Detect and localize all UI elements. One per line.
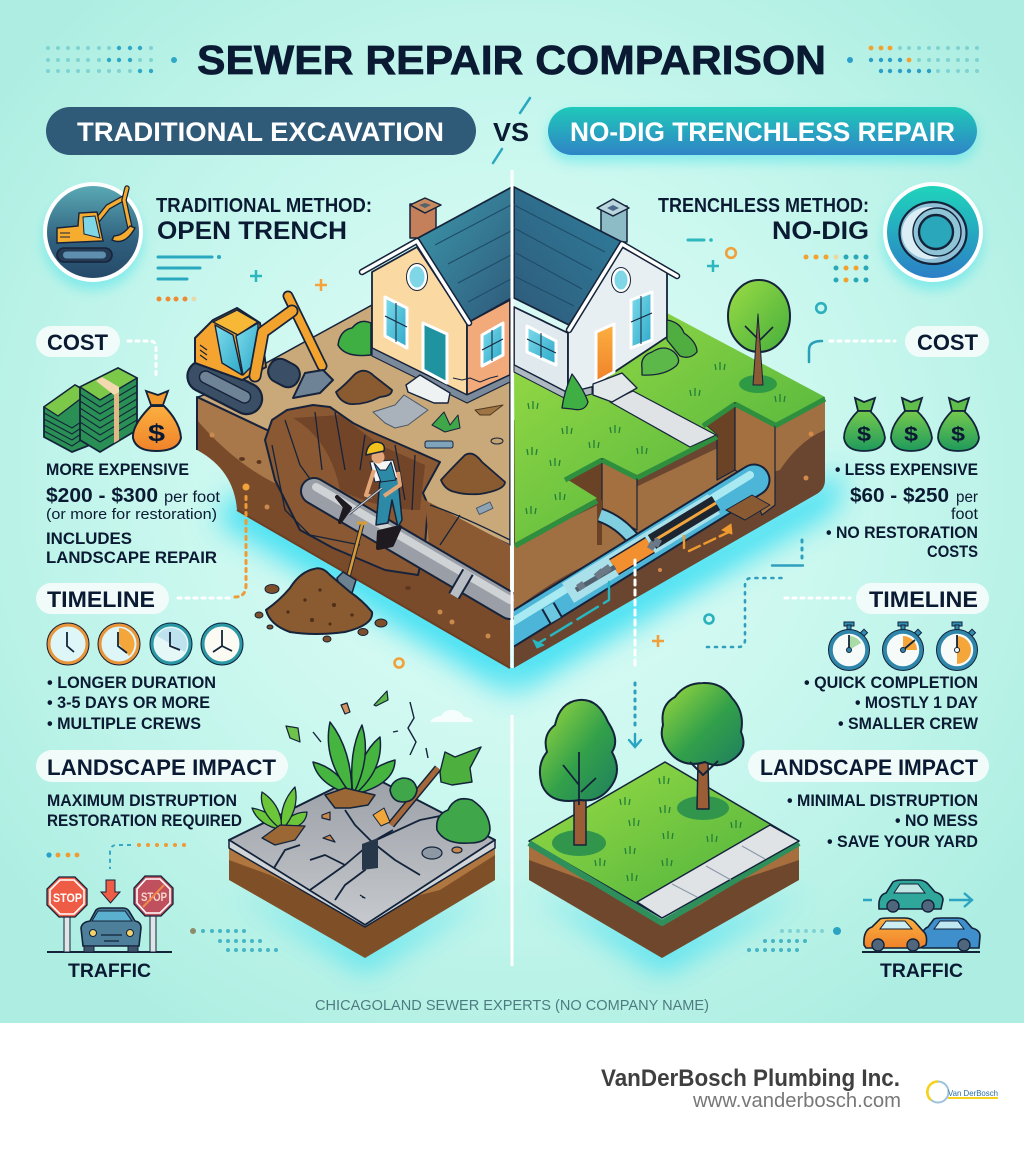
timeline details: left: • MULTIPLE CREWS: [47, 715, 201, 733]
vs label: [493, 98, 530, 163]
excavator: [182, 296, 333, 419]
worker: [349, 442, 402, 527]
dirt mounds: [336, 371, 505, 494]
cost details: right: [826, 461, 979, 561]
heading pill: traditional excavation: TRADITIONAL EXCAVATION: [77, 117, 444, 147]
icon: cash stacks and money bag: [44, 368, 181, 452]
landscape details: left: RESTORATION REQUIRED: [47, 812, 242, 830]
plant: large: [313, 722, 395, 808]
scene: damaged yard: [229, 691, 495, 958]
timeline details: left: • LONGER DURATION: [47, 674, 216, 692]
bushes: [390, 778, 490, 843]
decorative rings: [394, 614, 714, 668]
rubble: [373, 395, 503, 515]
caption: CHICAGOLAND SEWER EXPERTS (NO COMPANY NAME): [315, 997, 709, 1014]
timeline details: left: [47, 674, 216, 733]
title: SEWER REPAIR COMPARISON: [197, 37, 826, 83]
vs label: VS: [493, 117, 529, 147]
icon: three green money bags: $: [951, 424, 965, 446]
decorative dots: title right: [847, 46, 979, 73]
grass tufts: [526, 362, 785, 514]
house: damaged side: [338, 187, 512, 403]
method label: open trench: OPEN TRENCH: [157, 217, 347, 245]
cost details: left: [46, 461, 221, 567]
house: intact side: [514, 187, 697, 410]
landscape details: right: [787, 792, 978, 851]
shovel: [337, 523, 367, 593]
decorative dots: lower left: [46, 843, 278, 952]
cost details: left: INCLUDES: [46, 530, 132, 548]
walkway: [610, 391, 716, 447]
traffic label: right: TRAFFIC: [880, 960, 963, 982]
tree: right: [662, 683, 743, 820]
scene glow: [215, 470, 845, 975]
cost pill: left: [36, 326, 120, 357]
connector lines: [128, 341, 895, 747]
icon: three green money bags: [844, 398, 979, 451]
cost details: right: foot: [951, 506, 979, 523]
soil patch under pipe end: [726, 495, 770, 520]
timeline details: right: [804, 674, 978, 733]
footer website: www.vanderbosch.com: [692, 1090, 901, 1112]
landscape details: right: • SAVE YOUR YARD: [827, 833, 978, 851]
cost details: right: • LESS EXPENSIVE: [835, 461, 978, 479]
cost pill: right: [905, 326, 989, 357]
timeline pill: right: [856, 583, 989, 614]
decorative dots: title left: [46, 46, 177, 73]
icon: pipe ring badge: [883, 182, 983, 290]
icon: stop signs and car: [47, 876, 173, 952]
flow arrows: [533, 524, 732, 670]
timeline pill: left: [36, 583, 169, 614]
decorative dots: lower right: [747, 927, 841, 952]
lawn edge: [529, 843, 799, 923]
cost details: left: LANDSCAPE REPAIR: [46, 549, 217, 567]
method label: open trench: [156, 195, 372, 245]
cost details: left: MORE EXPENSIVE: [46, 461, 189, 479]
scene: no-dig trenchless: [506, 187, 825, 670]
landscape impact pill: right: LANDSCAPE IMPACT: [760, 755, 979, 780]
soil block: [197, 397, 510, 668]
flying leaves and debris: [286, 691, 462, 898]
cloud: [430, 710, 473, 722]
decorative marks: left: [156, 255, 327, 302]
method label: open trench: TRADITIONAL METHOD:: [156, 195, 372, 217]
landscape details: left: MAXIMUM DISTRUPTION: [47, 792, 237, 810]
timeline details: right: • MOSTLY 1 DAY: [855, 694, 978, 712]
cost details: left: (or more for restoration): [46, 507, 217, 523]
soil base: [529, 845, 799, 958]
scene: open trench excavation: [182, 187, 512, 668]
landscape details: right: • MINIMAL DISTRUPTION: [787, 792, 978, 810]
broken grey pipe: [314, 487, 510, 606]
heading pill: traditional excavation: [46, 107, 476, 155]
cost details: right: • NO RESTORATION: [826, 524, 978, 542]
cost details: left: $200 - $300: [46, 485, 158, 507]
icon: three green money bags: $: [904, 424, 918, 446]
footer band: [0, 1023, 1024, 1154]
ground surface: [198, 305, 510, 545]
icon: stopwatches: [828, 622, 978, 670]
logo: VanDerBosch: Van DerBosch: [948, 1088, 998, 1098]
icon: stop signs and car: STOP: [141, 892, 167, 904]
tree: left: [540, 700, 617, 856]
cost pill: right: COST: [917, 330, 979, 355]
lawn surface: [529, 762, 799, 918]
broken sapling: [373, 747, 481, 826]
icon: cash stacks and money bag: $: [148, 420, 166, 447]
icon: three green money bags: $: [857, 424, 871, 446]
timeline details: left: • 3-5 DAYS OR MORE: [47, 694, 210, 712]
sidewalk: [637, 825, 799, 918]
cost details: right: $60 - $250: [850, 485, 949, 507]
icon: clocks: [47, 622, 243, 665]
timeline details: right: • QUICK COMPLETION: [804, 674, 978, 692]
method label: no-dig: NO-DIG: [772, 217, 869, 245]
cost details: right: per: [956, 489, 978, 506]
method label: no-dig: [658, 195, 869, 245]
landscape details: right: • NO MESS: [895, 812, 978, 830]
heading pill: no-dig trenchless repair: NO-DIG TRENCHLESS REPAIR: [570, 117, 955, 147]
trench: [265, 405, 510, 600]
scene: intact yard: [529, 683, 799, 958]
soil base: [229, 840, 495, 958]
cracked concrete slab: [229, 773, 495, 927]
landscape impact pill: left: [36, 750, 288, 782]
icon: stop signs and car: STOP: [53, 893, 82, 905]
tree on lawn: [728, 280, 790, 393]
heading pill: no-dig trenchless repair: [548, 107, 977, 162]
logo: VanDerBosch: [927, 1081, 998, 1102]
grass lawn: [514, 313, 825, 543]
cost details: right: COSTS: [927, 543, 978, 561]
timeline pill: left: TIMELINE: [47, 587, 155, 612]
landscape details: left: [47, 792, 242, 830]
dirt pile: large: [255, 568, 387, 642]
icon: excavator badge: [43, 182, 143, 290]
traffic label: left: TRAFFIC: [68, 960, 151, 982]
plant: small: [252, 787, 307, 845]
cost pill: left: COST: [47, 330, 109, 355]
cost details: left: per foot: [164, 489, 221, 506]
decorative marks: right: [688, 238, 868, 313]
landscape impact pill: left: LANDSCAPE IMPACT: [47, 755, 277, 780]
icon: moving cars: [862, 880, 980, 952]
footer company name: VanDerBosch Plumbing Inc.: [601, 1065, 900, 1092]
grass edge: [515, 399, 825, 546]
grass tufts: [595, 776, 741, 881]
timeline pill: right: TIMELINE: [869, 587, 978, 612]
method label: no-dig: TRENCHLESS METHOD:: [658, 195, 869, 217]
notch walls: [565, 402, 775, 545]
center divider: [510, 170, 514, 966]
blue pipe with liner: [506, 475, 754, 632]
timeline details: right: • SMALLER CREW: [838, 715, 978, 733]
soil block: [514, 397, 825, 668]
